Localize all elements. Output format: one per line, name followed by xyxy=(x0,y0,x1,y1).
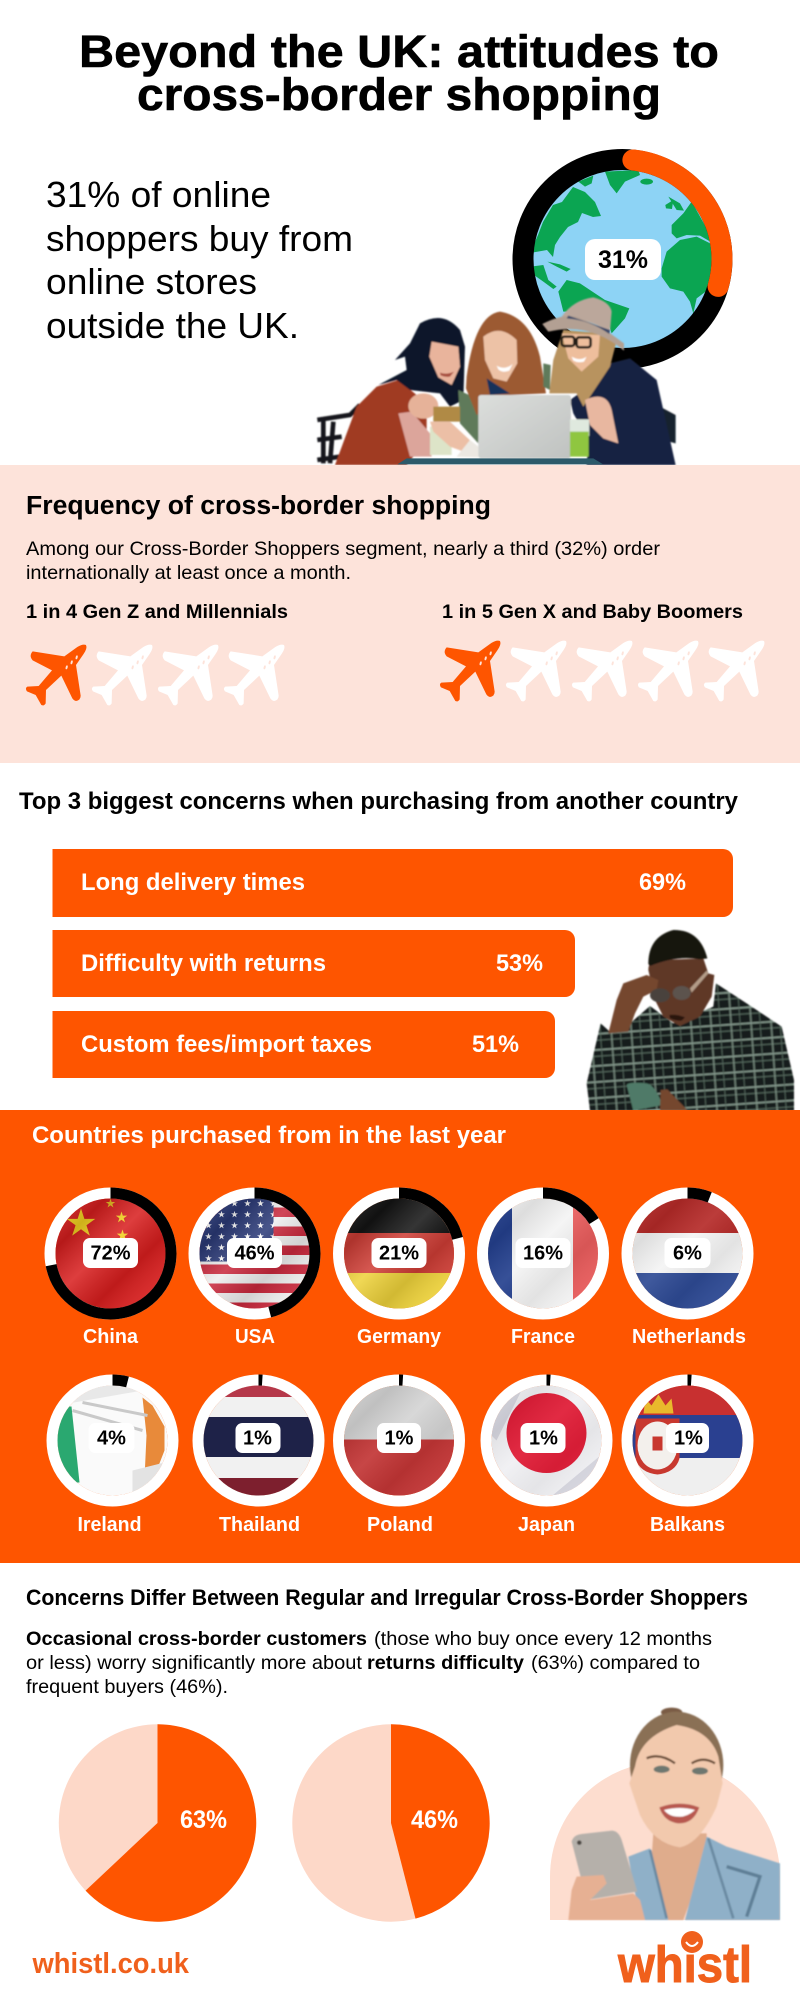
bar: difficulty with returns: Difficulty with returns xyxy=(81,950,326,977)
country: Japan 1% xyxy=(486,1380,607,1536)
frequency heading: Frequency of cross-border shopping xyxy=(26,492,491,520)
bar: long delivery times xyxy=(52,849,733,917)
country: USA 46% xyxy=(194,1193,315,1348)
paragraph: occasional vs frequent buyers xyxy=(26,1628,712,1698)
paragraph: occasional vs frequent buyers: (63%) compared to xyxy=(531,1652,700,1674)
intro statement: shoppers buy from xyxy=(46,218,353,259)
pie chart: frequent buyers 46% xyxy=(292,1724,490,1922)
bar: custom fees and import taxes xyxy=(52,1011,555,1078)
bar: custom fees and import taxes: Custom fees/import taxes xyxy=(81,1031,372,1058)
intro statement: online stores xyxy=(46,261,257,302)
photo: worried man with phone xyxy=(587,930,794,1111)
paragraph: occasional vs frequent buyers: (those who buy once every 12 months xyxy=(374,1628,712,1650)
bar: difficulty with returns: 53% xyxy=(496,950,543,977)
title xyxy=(79,26,719,120)
country: Germany 21% xyxy=(338,1193,460,1348)
paragraph: occasional vs frequent buyers: frequent buyers (46%). xyxy=(26,1676,228,1698)
bar: difficulty with returns xyxy=(52,930,575,997)
icons: five planes, one highlighted xyxy=(440,641,764,701)
country: China 72%: 72% xyxy=(90,1242,131,1264)
intro statement: outside the UK. xyxy=(46,305,299,346)
country: Thailand 1%: 1% xyxy=(243,1428,272,1450)
country: Ireland 4% xyxy=(52,1380,173,1536)
footer url: whistl.co.uk xyxy=(32,1948,189,1980)
bar: custom fees and import taxes: 51% xyxy=(472,1031,519,1058)
intro statement xyxy=(46,174,353,346)
Gen Z and Millennials stat xyxy=(26,602,288,705)
country: Ireland 4%: 4% xyxy=(97,1428,126,1450)
country: Thailand 1% xyxy=(198,1380,319,1536)
bar: long delivery times: Long delivery times xyxy=(81,869,305,896)
title: Beyond the UK: attitudes to xyxy=(79,26,719,77)
bar: long delivery times: 69% xyxy=(639,869,686,896)
icons: four planes, one highlighted xyxy=(26,645,284,705)
photo: smiling woman with phone xyxy=(550,1708,780,1920)
paragraph: occasional vs frequent buyers: Occasional cross-border customers xyxy=(26,1628,367,1650)
country: Poland 1% xyxy=(338,1380,460,1536)
country: Japan 1%: 1% xyxy=(529,1428,558,1450)
paragraph: occasional vs frequent buyers: returns difficulty xyxy=(367,1652,524,1674)
country: Netherlands 6%: 6% xyxy=(673,1242,702,1264)
paragraph: occasional vs frequent buyers: or less) worry significantly more about xyxy=(26,1652,363,1674)
heading: concerns differ: Concerns Differ Between Regular and Irregular Cross-Border Shoppers xyxy=(26,1585,748,1610)
country: China 72%: China xyxy=(83,1325,139,1348)
country: Poland 1%: Poland xyxy=(367,1513,433,1536)
pie chart: occasional buyers 63% xyxy=(59,1724,256,1922)
frequency body text: Among our Cross-Border Shoppers segment, nearly a third (32%) order xyxy=(26,538,661,560)
frequency body text: internationally at least once a month. xyxy=(26,562,351,584)
globe value label: 31% xyxy=(598,246,648,274)
title: cross-border shopping xyxy=(137,69,661,120)
country: Netherlands 6%: Netherlands xyxy=(632,1325,746,1348)
country: Balkans 1%: Balkans xyxy=(650,1513,725,1536)
panel: countries purchased from xyxy=(0,1110,800,1563)
frequency body text xyxy=(26,538,661,584)
intro statement: 31% of online xyxy=(46,174,271,215)
Gen X and Baby Boomers stat: 1 in 5 Gen X and Baby Boomers xyxy=(442,602,743,623)
country: Japan 1%: Japan xyxy=(518,1513,575,1536)
photo: three women with laptop xyxy=(317,297,676,465)
country: France 16%: 16% xyxy=(523,1242,563,1264)
country: Germany 21%: 21% xyxy=(379,1242,419,1264)
country: China 72% xyxy=(50,1193,171,1348)
Gen Z and Millennials stat: 1 in 4 Gen Z and Millennials xyxy=(26,602,288,623)
Gen X and Baby Boomers stat xyxy=(440,602,764,701)
logo: whistl: whistl xyxy=(617,1936,752,1993)
country: Thailand 1%: Thailand xyxy=(219,1513,300,1536)
pie chart: occasional buyers 63%: 63% xyxy=(180,1806,227,1834)
country: Balkans 1%: 1% xyxy=(674,1428,703,1450)
globe donut chart 31% xyxy=(523,160,722,358)
globe land masses xyxy=(530,170,717,333)
countries heading: Countries purchased from in the last year xyxy=(32,1122,506,1149)
panel: frequency of cross-border shopping xyxy=(0,465,800,763)
country: USA 46%: 46% xyxy=(234,1242,275,1264)
country: USA 46%: USA xyxy=(235,1325,275,1348)
heading: top 3 concerns: Top 3 biggest concerns when purchasing from another country xyxy=(19,788,739,815)
country: France 16% xyxy=(482,1193,604,1348)
country: Balkans 1% xyxy=(627,1380,748,1536)
country: France 16%: France xyxy=(511,1325,575,1348)
country: Germany 21%: Germany xyxy=(357,1325,442,1348)
pie chart: frequent buyers 46%: 46% xyxy=(411,1806,458,1834)
country: Netherlands 6% xyxy=(627,1193,748,1348)
country: Ireland 4%: Ireland xyxy=(78,1513,142,1536)
globe value label xyxy=(585,239,661,280)
country: Poland 1%: 1% xyxy=(385,1428,414,1450)
